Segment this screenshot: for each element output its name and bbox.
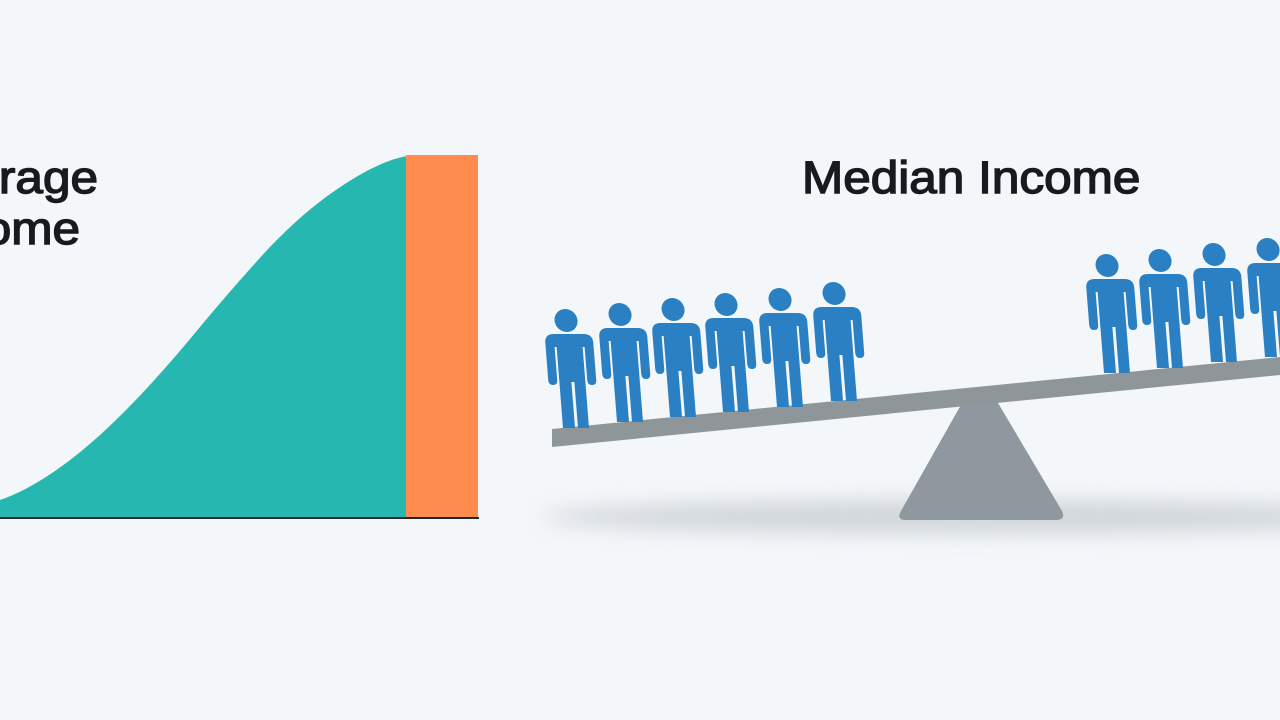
left group of people [543, 282, 868, 428]
heading: median income: Median Income [802, 153, 1140, 203]
heading: average income [0, 153, 98, 254]
right group of people [1084, 238, 1280, 373]
ground shadow [540, 500, 1280, 534]
teal area under curve [0, 156, 407, 518]
chart baseline [0, 517, 479, 519]
orange top-earners segment [406, 155, 478, 518]
chart: income distribution curve [0, 155, 479, 519]
tilted beam [552, 357, 1280, 447]
seesaw [552, 357, 1280, 520]
fulcrum [899, 403, 1063, 520]
panel: average income [0, 153, 479, 519]
panel: median income [540, 153, 1280, 534]
